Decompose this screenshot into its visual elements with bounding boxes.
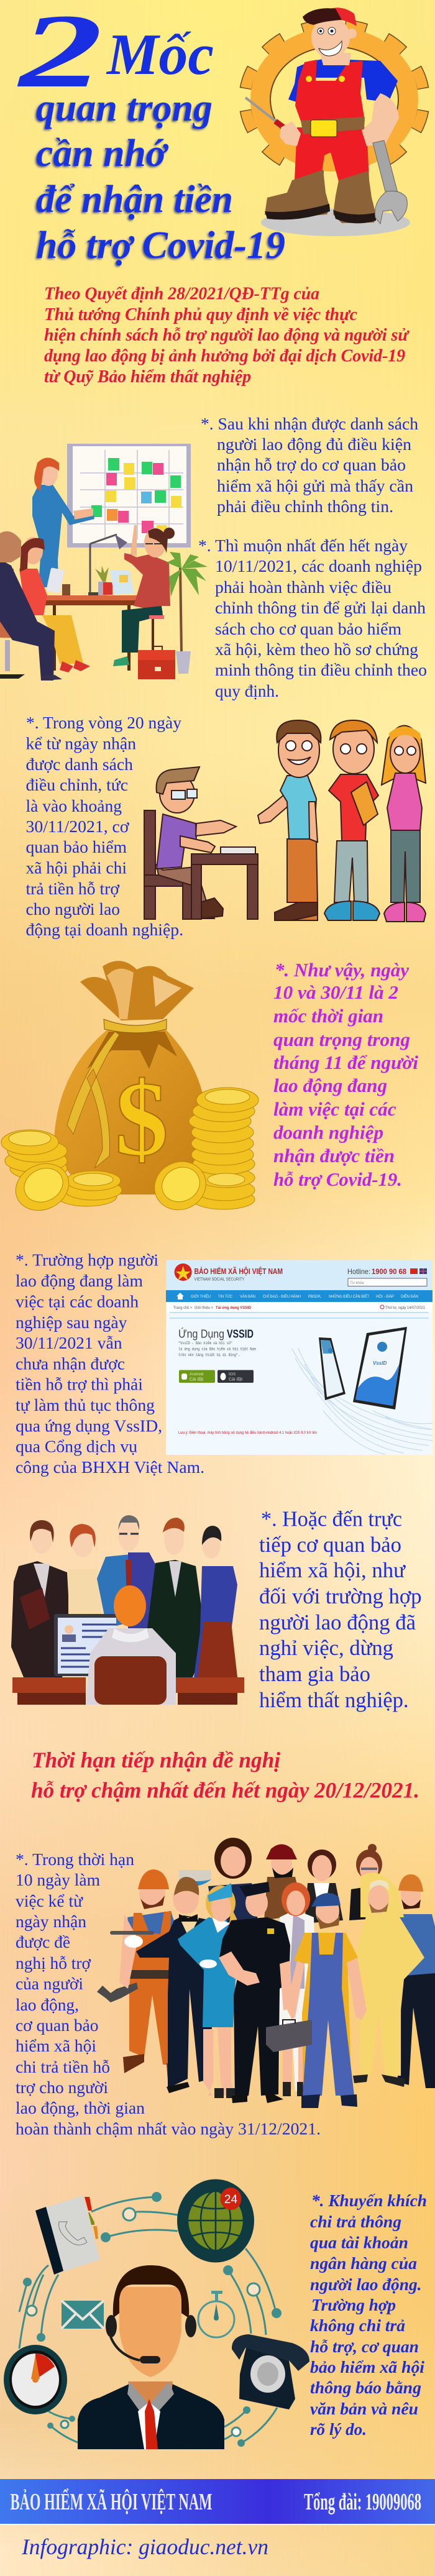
text block: third note: *. Trong vòng 20 ngày — [26, 713, 181, 732]
whiteboard — [67, 444, 191, 548]
text block: first note: phải điều chỉnh thông tin. — [217, 497, 393, 516]
text block: bank transfer note: Trường hợp — [311, 2295, 396, 2314]
breadcrumb — [166, 1302, 433, 1318]
navigation bar: TIN TỨC — [218, 1293, 232, 1299]
flight attendant — [178, 1883, 240, 2098]
app heading: VSSID — [227, 1328, 254, 1341]
text block: VssID note: qua ứng dụng VssID, — [16, 1416, 162, 1436]
seated man and chair — [0, 531, 62, 681]
text block: second note — [198, 536, 427, 700]
mechanic with toolbox — [266, 1893, 367, 2108]
text block: second note: sách cho cơ quan bảo hiểm — [215, 619, 401, 638]
text block: third note: 30/11/2021, cơ — [26, 817, 129, 836]
intro text: dụng lao động bị ảnh hưởng bởi đại dịch Covid-19 — [44, 347, 405, 365]
navigation bar: GIỚI THIỆU — [191, 1293, 211, 1299]
bag flaps — [80, 961, 194, 1020]
bag body — [54, 1029, 207, 1194]
text block: direct visit: hiểm xã hội, như — [259, 1559, 406, 1582]
app heading: là ứng dụng của Bảo hiểm xã hội Việt Nam — [178, 1346, 256, 1351]
icon: envelope — [62, 2301, 104, 2329]
text block: bank transfer note: hỗ trợ, cơ quan — [310, 2337, 419, 2356]
text block: ten working days: *. Trong thời hạn — [16, 1849, 134, 1869]
text block: third note: cho người lao — [26, 899, 120, 919]
screwdriver — [245, 98, 277, 122]
suit — [78, 2383, 224, 2449]
intro text: từ Quỹ Bảo hiểm thất nghiệp — [44, 367, 251, 387]
text block: bank transfer note: bảo hiểm xã hội — [310, 2357, 424, 2377]
desk lamp — [88, 534, 127, 595]
chef in yellow — [353, 1872, 424, 2087]
potted plant — [167, 552, 208, 674]
text block: second note: xã hội, kèm theo hồ sơ chứng — [215, 639, 418, 659]
text block: first note: người lao động đủ điều kiện — [217, 434, 411, 454]
man in dark suit — [147, 1518, 205, 1677]
text block: ten working days: cơ quan bảo — [16, 2015, 98, 2035]
woman far right — [194, 1526, 237, 1677]
cap — [314, 7, 357, 26]
navigation bar: DIỄN ĐÀN — [401, 1293, 418, 1299]
text block: bank transfer note: chi trả thông — [310, 2212, 401, 2231]
navigation bar: HỎI - ĐÁP — [376, 1293, 394, 1299]
hair — [113, 2265, 189, 2318]
callout: magenta summary: hỗ trợ Covid-19. — [273, 1168, 402, 1190]
heading: deadline — [31, 1748, 419, 1803]
heading: deadline: Thời hạn tiếp nhận đề nghị — [32, 1748, 280, 1772]
callout: magenta summary: tháng 11 để người — [273, 1052, 418, 1073]
callout: magenta summary: nhận được tiền — [273, 1145, 395, 1167]
text block: second note: 10/11/2021, các doanh nghiệp — [215, 556, 422, 575]
text block: bank transfer note: ngân hàng của — [310, 2253, 417, 2273]
intro text: Theo Quyết định 28/2021/QĐ-TTg của — [44, 285, 319, 303]
icon: stopwatch — [198, 2291, 234, 2337]
download buttons: Cài đặt — [190, 1377, 203, 1382]
wrench — [373, 140, 398, 196]
icon: globe — [177, 2179, 254, 2262]
illustration: mechanic with gear — [245, 7, 424, 236]
text block: bank transfer note: rõ lý do. — [310, 2419, 367, 2439]
callout: magenta summary: lao động đang — [273, 1075, 387, 1096]
panel: VssID website screenshot — [166, 1260, 433, 1455]
callout: magenta summary: mốc thời gian — [273, 1005, 383, 1027]
woman with glasses, raised hand — [113, 0, 268, 666]
text block: third note: động tại doanh nghiệp. — [26, 920, 183, 939]
navigation bar: CHỈ ĐẠO - ĐIỀU HÀNH — [263, 1293, 301, 1299]
breadcrumb: Trang chủ > — [173, 1306, 192, 1310]
illustration: staff group with laptop — [11, 1515, 244, 1705]
text block: ten working days: hiểm xã hội — [16, 2036, 96, 2055]
title lines: cần nhớ — [36, 132, 169, 175]
back row woman with dark jacket — [304, 1849, 343, 1923]
text block: third note: trả tiền hỗ trợ — [26, 879, 119, 898]
connector lines — [19, 2197, 277, 2443]
seated person from behind — [86, 1585, 176, 1705]
text block: bank transfer note: qua tài khoản — [310, 2233, 408, 2252]
callout: magenta summary: quan trọng trong — [273, 1029, 410, 1050]
text block: third note: điều chỉnh, tức — [26, 775, 128, 794]
table — [29, 595, 158, 671]
doctor with white coat — [278, 1882, 316, 2096]
worker far right — [398, 1874, 435, 2088]
text block: direct visit: nghỉ việc, dừng — [259, 1636, 393, 1660]
title — [16, 0, 285, 267]
builder with orange overalls — [97, 1869, 178, 2081]
text block: second note: quy định. — [215, 681, 279, 700]
text block: third note: kể từ ngày nhận — [26, 733, 136, 753]
text block: first note: nhận hỗ trợ do cơ quan bảo — [217, 455, 406, 474]
illustration: office team at whiteboard — [0, 0, 268, 681]
site header: 1900 90 68 — [372, 1267, 406, 1276]
seated woman — [19, 537, 90, 672]
man center with tie — [97, 1515, 160, 1628]
back row woman — [208, 1838, 258, 1923]
text block: third note: xã hội phải chi — [26, 858, 127, 878]
navigation bar: PBGDPL — [308, 1295, 321, 1299]
text block: direct visit: *. Hoặc đến trực — [261, 1508, 402, 1531]
text block: ten working days — [16, 1849, 321, 2138]
policeman — [219, 1882, 292, 2103]
callout: magenta summary: *. Như vậy, ngày — [275, 959, 409, 981]
text block: ten working days: của người — [16, 1974, 83, 1993]
head — [320, 53, 351, 65]
illustration: money bag with coins — [1, 961, 259, 1219]
download buttons: Cài đặt — [229, 1377, 242, 1382]
illustration: customer support with icons — [4, 2179, 309, 2449]
text block: ten working days: nghị hỗ trợ — [16, 1953, 91, 1973]
person in pink jacket — [382, 726, 426, 922]
icon: gear — [245, 25, 424, 174]
text block: direct visit: tham gia bảo — [259, 1662, 370, 1686]
boots — [265, 170, 330, 219]
person in blue shirt — [258, 720, 321, 920]
download buttons — [179, 1370, 254, 1383]
text block: ten working days: ngày nhận — [16, 1912, 86, 1931]
text block: direct visit: hiểm thất nghiệp. — [259, 1689, 409, 1712]
site header: Hotline: — [347, 1267, 370, 1276]
seated man — [157, 767, 236, 919]
text block: third note: quan bảo hiểm — [26, 837, 127, 856]
text block: ten working days: 10 ngày làm — [16, 1870, 100, 1889]
navigation bar — [166, 1290, 433, 1302]
back row woman with glasses — [349, 1844, 396, 1920]
text block: direct visit — [259, 1508, 421, 1712]
site header: BẢO HIỂM XÃ HỘI VIỆT NAM — [194, 1267, 283, 1276]
breadcrumb: Thứ tư, ngày 14/07/2021 — [385, 1306, 426, 1310]
text block: direct visit: tiếp cơ quan bảo — [259, 1533, 401, 1557]
text block: second note: chỉnh thông tin để gửi lại danh — [215, 598, 426, 617]
title lines — [36, 87, 285, 267]
text block: VssID note: tự làm thủ tục thông — [16, 1395, 155, 1414]
callout: magenta summary: làm việc tại các — [273, 1098, 396, 1120]
person far left — [11, 1520, 71, 1677]
chair — [144, 810, 191, 919]
site header: VIETNAM SOCIAL SECURITY — [194, 1278, 245, 1281]
face — [119, 2287, 181, 2377]
standing woman — [32, 457, 94, 587]
text block: first note: hiểm xã hội gửi mà thấy cần — [217, 476, 413, 495]
text block: second note: phải hoàn thành việc điều — [215, 577, 392, 597]
decorative waves — [292, 1349, 433, 1454]
left coins — [1, 1130, 122, 1219]
app heading: trên nền tảng thiết bị di động". — [178, 1352, 240, 1357]
footer band — [0, 2479, 435, 2525]
app heading: Ứng Dụng — [178, 1327, 224, 1341]
desk — [191, 847, 258, 919]
overalls — [295, 60, 365, 121]
site header: Từ khóa — [350, 1281, 364, 1285]
icon: phone book — [35, 2196, 100, 2275]
text block: ten working days: chi trả tiền hỗ — [16, 2057, 110, 2076]
word Mốc: Mốc — [106, 22, 214, 87]
text block: bank transfer note: văn bản và nêu — [310, 2399, 418, 2418]
illustration: group of workers — [97, 1838, 435, 2108]
breadcrumb: Tải ứng dụng VSSID — [216, 1306, 252, 1310]
callout: magenta summary: doanh nghiệp — [273, 1121, 383, 1144]
text block: bank transfer note: không chi trả — [310, 2316, 405, 2335]
laptop — [54, 1614, 116, 1676]
badge 24: 24 — [224, 2193, 237, 2206]
belt — [301, 117, 365, 134]
person in red shirt — [324, 720, 380, 920]
title lines: quan trọng — [36, 87, 213, 129]
intro text: Thủ tướng Chính phủ quy định về việc thực — [44, 305, 358, 324]
breadcrumb: Giới thiệu > — [195, 1306, 213, 1310]
person with headset — [78, 2265, 224, 2449]
text block: VssID note: *. Trường hợp người — [16, 1250, 158, 1269]
text block: ten working days: trợ cho người — [16, 2078, 108, 2097]
text block: VssID note: lao động đang làm — [16, 1271, 143, 1290]
title lines: để nhận tiền — [36, 178, 233, 221]
text block: VssID note: 30/11/2021 vẫn — [16, 1333, 122, 1352]
text block: VssID note: công của BHXH Việt Nam. — [16, 1457, 204, 1477]
navigation bar: VĂN BẢN — [240, 1293, 255, 1299]
text block: bank transfer note: thông báo bằng — [310, 2378, 421, 2397]
app heading — [178, 1327, 256, 1357]
text block: ten working days: lao động, — [16, 1995, 79, 2014]
red notice: Lưu ý: Điện thoại, máy tính bảng sử dụng hệ điều hành Android 4.1 hoặc IOS 9.0 trở lên — [178, 1429, 317, 1435]
text block: VssID note: nghiệp sau ngày — [16, 1313, 127, 1332]
heading: deadline: hỗ trợ chậm nhất đến hết ngày 20/12/2021. — [31, 1778, 419, 1803]
desk items — [62, 566, 134, 595]
phone and tablet — [319, 1327, 407, 1409]
red bag — [138, 646, 175, 679]
intro text — [44, 285, 410, 387]
icon: rotary telephone — [232, 2334, 309, 2409]
app heading: "VssID - Bảo hiểm xã hội số" — [178, 1340, 232, 1345]
desk — [12, 1677, 244, 1705]
text block: first note: *. Sau khi nhận được danh sách — [201, 414, 418, 433]
text block: VssID note: tiền hỗ trợ thì phải — [16, 1375, 143, 1394]
text block: third note: được danh sách — [26, 754, 133, 774]
text block: ten working days: được đề — [16, 1932, 70, 1951]
text block: direct visit: người lao động đã — [259, 1611, 416, 1634]
icon: wall clock — [4, 2345, 67, 2414]
callout: magenta summary — [273, 959, 418, 1190]
text block: third note — [26, 713, 183, 939]
text block: second note: minh thông tin điều chỉnh theo — [215, 660, 427, 679]
dollar sign: $ — [115, 1060, 168, 1178]
text block: VssID note: chưa nhận được — [16, 1354, 125, 1373]
rope tie — [104, 1019, 167, 1033]
download buttons: Android — [190, 1372, 204, 1377]
intro text: hiện chính sách hỗ trợ người lao động và người sử — [44, 326, 410, 345]
text block: third note: là vào khoảng — [26, 796, 122, 815]
text block: first note — [201, 414, 418, 516]
shirt — [288, 58, 398, 103]
woman second left — [68, 1524, 103, 1641]
legs — [295, 127, 369, 181]
illustration: man at desk receiving people — [144, 720, 426, 922]
text block: ten working days: lao động, thời gian — [16, 2098, 145, 2117]
text block: ten working days: hoàn thành chậm nhất vào ngày 31/12/2021. — [16, 2119, 321, 2138]
text block: bank transfer note: *. Khuyến khích — [311, 2191, 427, 2210]
callout: magenta summary: 10 và 30/11 là 2 — [273, 981, 398, 1003]
right arm — [362, 93, 399, 146]
back row bearded man — [264, 1845, 304, 1920]
text block: VssID note: qua Cổng dịch vụ — [16, 1437, 137, 1456]
text block: bank transfer note — [310, 2191, 427, 2439]
waiter with tray — [110, 1870, 213, 2093]
right coin stack — [147, 1088, 259, 1218]
text block: VssID note: việc tại các doanh — [16, 1291, 139, 1311]
text block: ten working days: việc kể từ — [16, 1891, 83, 1910]
title lines: hỗ trợ Covid-19 — [36, 224, 285, 267]
text block: VssID note — [16, 1250, 204, 1477]
headset — [106, 2315, 117, 2337]
text block: bank transfer note: người lao động. — [310, 2275, 421, 2294]
download buttons: IOS — [229, 1372, 236, 1377]
site header — [166, 1260, 433, 1290]
text block: second note: *. Thì muộn nhất đến hết ngày — [198, 536, 408, 555]
text block: direct visit: đối với trường hợp — [259, 1585, 421, 1608]
organisation name: BẢO HIỂM XÃ HỘI VIỆT NAM — [10, 2488, 213, 2515]
source credit: Infographic: giaoduc.net.vn — [21, 2534, 268, 2559]
navigation bar: NHỮNG ĐIỀU CẦN BIẾT — [329, 1293, 369, 1299]
phone and tablet: VssID — [373, 1360, 387, 1366]
